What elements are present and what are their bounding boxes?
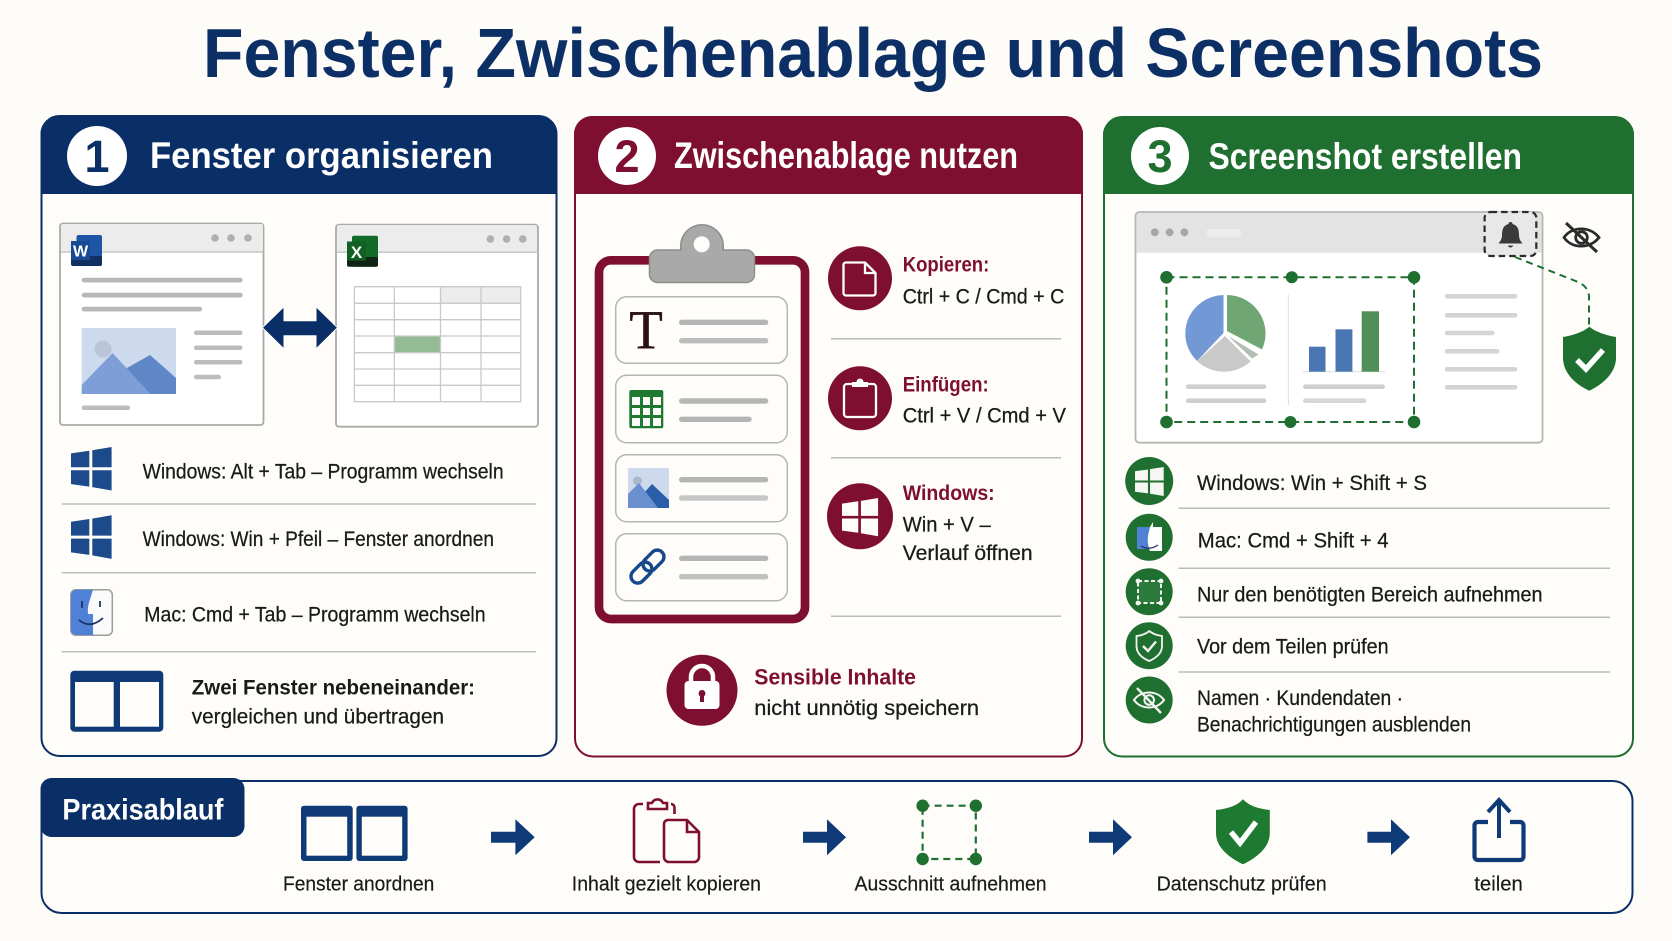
step 3: take selection: Ausschnitt aufnehmen <box>854 874 1047 896</box>
icon: eye crossed out <box>1564 223 1599 252</box>
step: Kopieren: Ctrl + C / Cmd + C <box>903 285 1064 308</box>
panel: Fenster organisieren <box>40 116 557 756</box>
clipboard item: image <box>616 455 787 522</box>
item: check before sharing: Vor dem Teilen prüfen <box>1197 635 1389 658</box>
panel header 2: Zwischenablage nutzen <box>674 135 1018 176</box>
step 1: arrange windows <box>283 806 434 896</box>
icon: Excel <box>347 236 378 267</box>
panel header 2: 2 <box>614 131 640 182</box>
label: Praxisablauf <box>40 778 244 837</box>
clipboard item: link <box>616 534 787 601</box>
step 5: share: teilen <box>1474 874 1523 896</box>
step 1: arrange windows: Fenster anordnen <box>283 874 434 896</box>
panel header 2 <box>574 116 1083 194</box>
illustration: Excel window <box>336 225 538 427</box>
note: sensitive content: Sensible Inhalte <box>754 664 916 689</box>
title: Fenster, Zwischenablage und Screenshots <box>203 14 1543 92</box>
step 4: check privacy <box>1157 799 1327 896</box>
panel header 1 <box>40 116 557 194</box>
icon: shield check <box>1563 327 1616 391</box>
icon: Word: W <box>73 244 89 260</box>
item: hide data <box>1126 676 1471 737</box>
panel: Zwischenablage nutzen <box>574 116 1083 756</box>
shortcut: Win+Pfeil <box>71 515 494 559</box>
illustration: Word window <box>60 224 264 425</box>
clipboard item: text: T <box>629 299 663 360</box>
item: select area <box>1126 568 1542 615</box>
arrow <box>491 819 535 855</box>
dashed connector <box>1515 257 1589 326</box>
item: Win+Shift+S <box>1125 457 1427 505</box>
clipboard item: text <box>616 297 787 363</box>
selection frame <box>1160 271 1420 428</box>
panel: Screenshot erstellen <box>1103 117 1634 756</box>
note: sensitive content <box>666 655 979 726</box>
clipboard clip <box>650 225 754 282</box>
illustration: screenshot window <box>1136 212 1542 443</box>
shortcut: Cmd+Tab: Mac: Cmd + Tab – Programm wechseln <box>144 604 486 627</box>
panel: Praxisablauf <box>40 778 1632 913</box>
tip: two windows side by side: vergleichen und übertragen <box>192 705 444 728</box>
item: hide data: Namen · Kundendaten · <box>1197 687 1403 710</box>
panel header 3: 3 <box>1147 131 1173 182</box>
item: select area: Nur den benötigten Bereich aufnehmen <box>1197 584 1542 607</box>
shortcut: Alt+Tab: Windows: Alt + Tab – Programm wechseln <box>143 460 504 483</box>
step: Windows Verlauf <box>827 482 1033 565</box>
icon: Excel: X <box>351 243 363 262</box>
arrow <box>1089 819 1132 855</box>
step 2: copy content: Inhalt gezielt kopieren <box>572 874 761 896</box>
step: Kopieren: Kopieren: <box>903 254 989 277</box>
step 5: share <box>1474 800 1524 896</box>
step: Einfügen <box>828 366 1066 430</box>
arrow: double arrow between windows <box>262 307 338 349</box>
panel header 3 <box>1103 117 1634 194</box>
panel header 1: 1 <box>84 131 110 182</box>
item: Cmd+Shift+4: Mac: Cmd + Shift + 4 <box>1198 529 1389 552</box>
item: hide data: Benachrichtigungen ausblenden <box>1197 714 1471 737</box>
shortcut: Cmd+Tab <box>71 590 486 635</box>
illustration: clipboard <box>599 225 805 619</box>
tip: two windows side by side <box>70 671 475 732</box>
step: Einfügen: Ctrl + V / Cmd + V <box>903 405 1066 428</box>
panel header 3: Screenshot erstellen <box>1208 136 1522 177</box>
step: Kopieren <box>828 246 1064 310</box>
item: check before sharing <box>1126 622 1389 669</box>
icon: Word <box>71 235 102 266</box>
clipboard item: table <box>616 375 787 443</box>
icon: split window <box>70 671 163 732</box>
step: Windows Verlauf: Win + V – <box>903 514 991 537</box>
note: sensitive content: nicht unnötig speichern <box>754 697 979 720</box>
panel header 1: Fenster organisieren <box>150 135 493 176</box>
step 2: copy content <box>572 799 761 896</box>
image placeholder <box>82 328 176 394</box>
icon: masked notification bell <box>1485 212 1536 256</box>
shortcut: Win+Pfeil: Windows: Win + Pfeil – Fenster anordnen <box>143 528 494 551</box>
step: Windows Verlauf: Windows: <box>903 482 995 505</box>
step: Einfügen: Einfügen: <box>903 374 989 397</box>
tip: two windows side by side: Zwei Fenster nebeneinander: <box>192 676 475 699</box>
arrow <box>803 819 846 855</box>
shortcut: Alt+Tab <box>71 447 504 491</box>
step 4: check privacy: Datenschutz prüfen <box>1157 874 1327 896</box>
item: Win+Shift+S: Windows: Win + Shift + S <box>1197 472 1427 495</box>
spreadsheet table <box>354 287 521 402</box>
pie chart <box>1185 295 1266 372</box>
step 3: take selection <box>854 800 1047 896</box>
icon: Mac Finder <box>71 590 112 635</box>
step: Windows Verlauf: Verlauf öffnen <box>903 542 1033 565</box>
item: Cmd+Shift+4 <box>1126 514 1389 561</box>
label: Praxisablauf: Praxisablauf <box>62 793 224 826</box>
arrow <box>1367 819 1410 855</box>
bar chart <box>1303 311 1385 372</box>
